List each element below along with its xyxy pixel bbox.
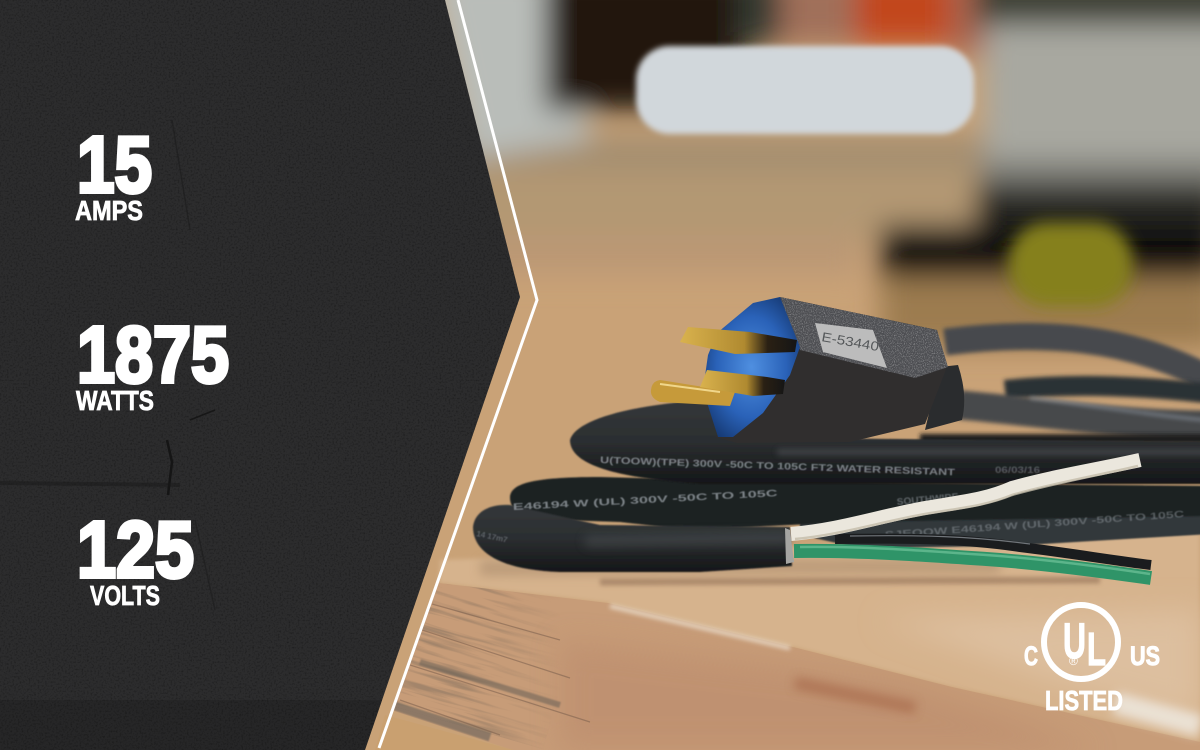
unit: volts: VOLTS <box>90 580 160 611</box>
cable print text: E46194 W (UL) 300V -50C TO 105C <box>513 488 778 513</box>
unit: amps: AMPS <box>75 195 143 226</box>
lower right cable <box>800 498 1200 548</box>
ground pin <box>651 380 735 406</box>
stat: 125 volts <box>77 505 194 611</box>
table front face <box>394 583 1200 750</box>
rear cable middle <box>1005 386 1200 394</box>
rear cable lower <box>960 405 1200 425</box>
cable print text: SOUTHWIRE <box>896 492 959 508</box>
number: 1875: 1875 <box>77 310 229 399</box>
wooden table <box>394 534 1200 750</box>
cable print text <box>476 455 1185 545</box>
cable print text: SJEOOW E46194 W (UL) 300V -50C TO 105C <box>884 509 1185 541</box>
stat: 15 amps <box>75 120 152 226</box>
icon: UL listed certification mark <box>1024 605 1160 716</box>
black wire <box>835 539 1151 565</box>
plug body <box>715 297 947 443</box>
blue translucent face <box>703 297 800 437</box>
plug: E-53440 <box>820 329 880 354</box>
middle coil <box>510 477 1200 530</box>
icon: UL listed certification mark: U <box>1063 613 1086 669</box>
rear cable top <box>945 336 1200 382</box>
cable print text: 06/03/16 <box>995 465 1040 476</box>
cable print text: 14 17m7 <box>476 529 509 545</box>
icon: UL listed certification mark: US <box>1130 641 1160 671</box>
icon: UL listed certification mark: LISTED <box>1045 685 1123 716</box>
dark mass behind plug and coils <box>920 434 1200 444</box>
bottom sheathed cable <box>473 505 792 572</box>
yellow blurred object <box>1008 222 1133 307</box>
pale scrape on table edge <box>610 606 790 648</box>
number: 15: 15 <box>77 120 152 209</box>
table shadow streak <box>600 580 1100 582</box>
stat: 1875 watts <box>76 310 229 416</box>
top blade <box>680 327 797 354</box>
number: 125: 125 <box>77 505 194 594</box>
stripped wires <box>785 460 1151 578</box>
white chevron outline <box>379 0 537 748</box>
plug top face <box>780 297 948 378</box>
green wire <box>794 551 1151 578</box>
icon: UL listed certification mark: ® <box>1069 654 1078 668</box>
table top surface <box>439 530 1200 742</box>
unit: watts: WATTS <box>76 385 154 416</box>
icon: UL listed certification mark: L <box>1087 623 1106 675</box>
strain relief <box>925 365 964 430</box>
white blurred bar <box>636 46 974 134</box>
cut sheath end <box>785 528 794 564</box>
lower blade <box>700 370 785 396</box>
cable print text: U(TOOW)(TPE) 300V -50C TO 105C FT2 WATER RESISTANT <box>600 455 955 478</box>
label plate <box>815 323 887 368</box>
white wire <box>791 460 1140 534</box>
bottom left floor wedge <box>375 715 513 750</box>
pale glare bottom right <box>1115 703 1200 726</box>
plug <box>651 290 964 443</box>
panel: dark spec panel <box>0 0 530 750</box>
icon: UL listed certification mark: C <box>1024 641 1038 671</box>
power cord coils <box>473 336 1200 572</box>
top main coil <box>570 400 1200 484</box>
